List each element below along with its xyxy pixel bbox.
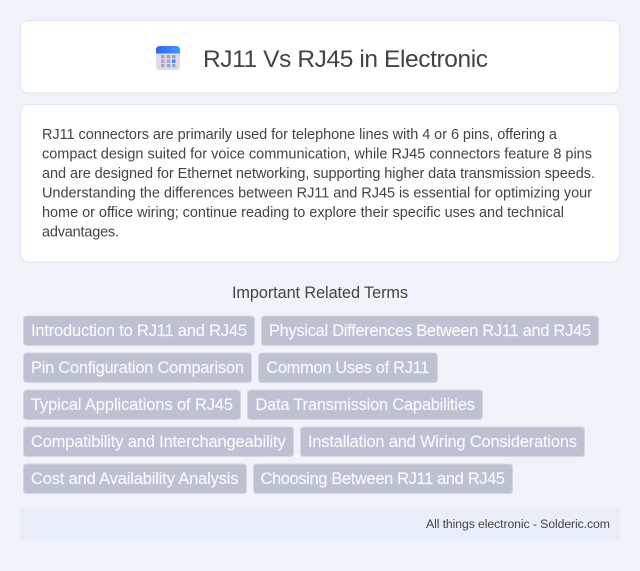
heading: important related terms: Important Related Terms (232, 284, 408, 302)
description text: RJ11 connectors are primarily used for telephone lines with 4 or 6 pins, offering a (42, 127, 558, 143)
tag: cost (24, 464, 246, 494)
description text: and are designed for Ethernet networking, supporting higher data transmission speeds. (42, 166, 595, 182)
tag: cost: Cost and Availability Analysis (31, 470, 238, 488)
tag: common uses (258, 353, 438, 382)
tag: physical differences (262, 316, 598, 346)
tag: introduction: Introduction to RJ11 and RJ45 (31, 322, 247, 340)
tag: typical applications (24, 390, 240, 420)
tag: pin configuration: Pin Configuration Comparison (31, 359, 244, 377)
description text: home or office wiring; continue reading to explore their specific uses and technical (42, 205, 564, 221)
tag: data transmission: Data Transmission Capabilities (256, 396, 475, 414)
tag: choosing (254, 464, 512, 494)
tag: data transmission (248, 390, 482, 420)
description text: advantages. (42, 224, 119, 240)
tag: compatibility (24, 427, 294, 456)
tag: pin configuration (24, 353, 252, 382)
title: RJ11 Vs RJ45 in Electronic (203, 46, 488, 73)
icon: calendar (156, 46, 180, 70)
panel: description (20, 104, 620, 262)
footer band (20, 507, 620, 541)
panel: title header (20, 20, 620, 93)
tag: compatibility: Compatibility and Interchangeability (31, 433, 286, 451)
tag: common uses: Common Uses of RJ11 (266, 359, 429, 377)
tag: typical applications: Typical Applications of RJ45 (31, 396, 233, 414)
description text (42, 127, 595, 240)
tag: installation: Installation and Wiring Considerations (308, 433, 577, 451)
tag: introduction (24, 316, 254, 346)
description text: compact design suited for voice communication, while RJ45 connectors feature 8 pins (42, 146, 592, 162)
tag: choosing: Choosing Between RJ11 and RJ45 (260, 470, 505, 488)
panel: related term tags (24, 316, 598, 494)
description text: Understanding the differences between RJ11 and RJ45 is essential for optimizing your (42, 186, 592, 202)
tag: physical differences: Physical Differences Between RJ11 and RJ45 (269, 322, 591, 340)
footer text: All things electronic - Solderic.com (426, 517, 610, 531)
tag: installation (300, 427, 584, 456)
